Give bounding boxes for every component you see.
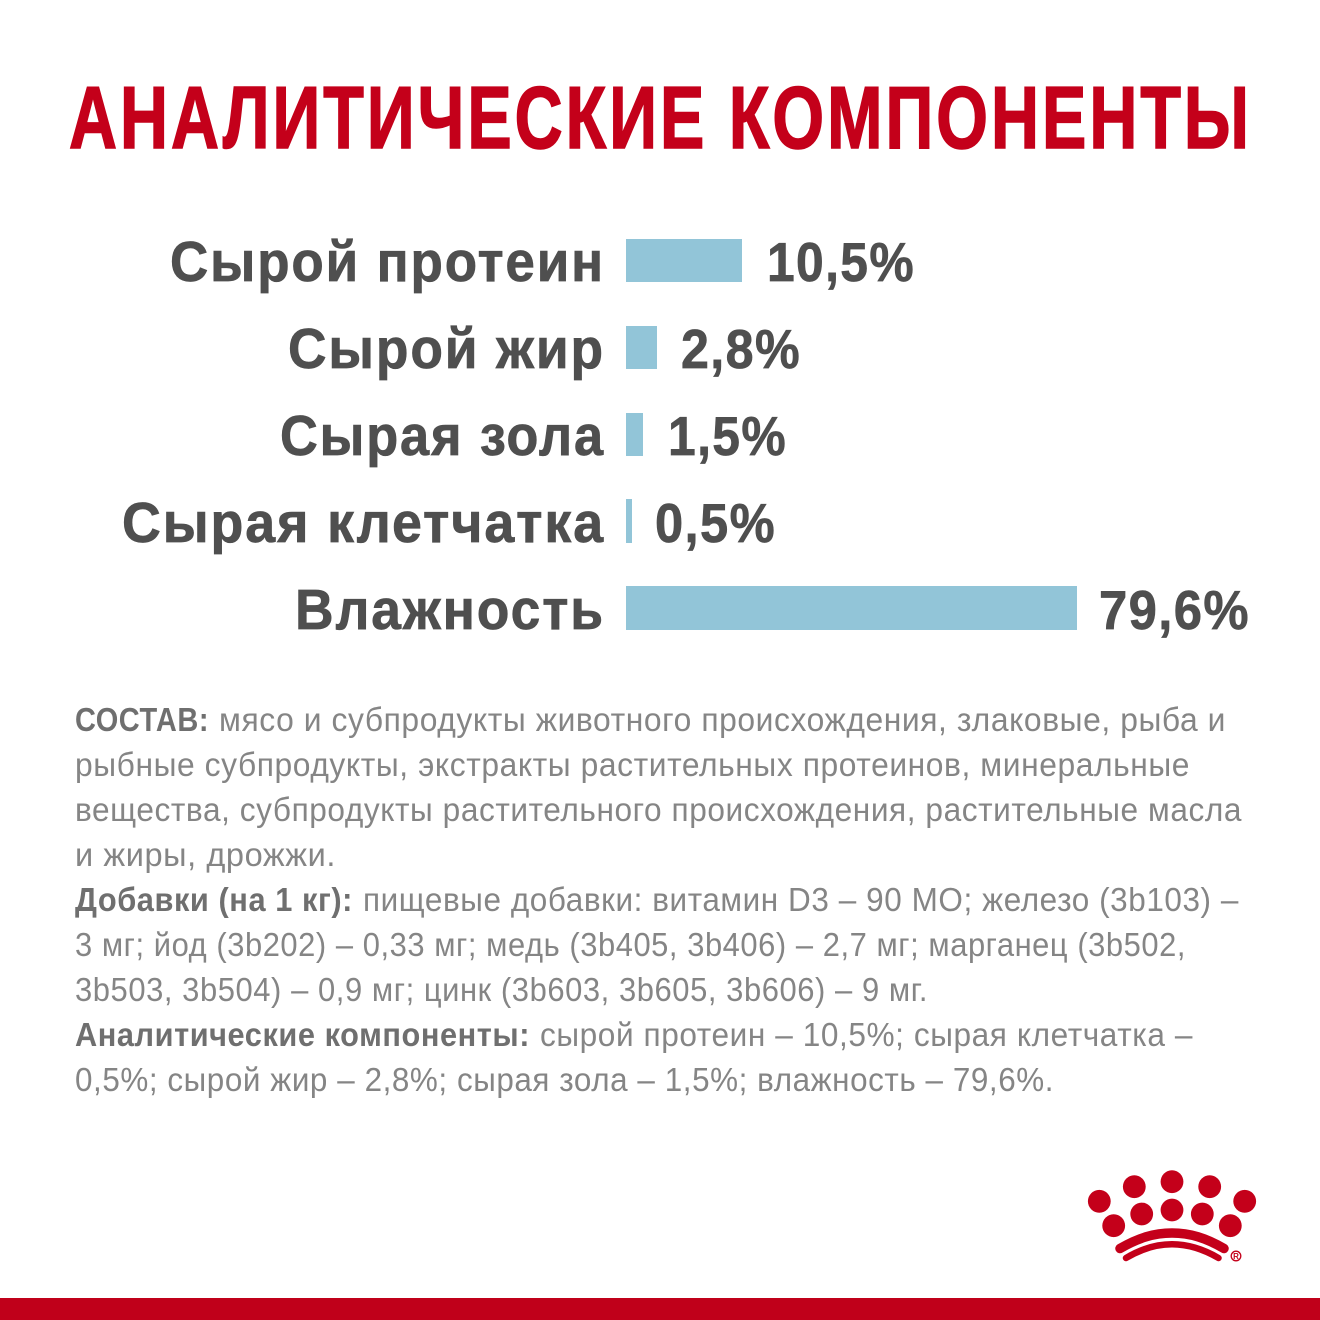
footer red band bbox=[0, 1298, 1320, 1320]
icon: royal crown logo: R bbox=[1233, 1252, 1239, 1261]
composition text block: и жиры, дрожжи. bbox=[75, 836, 336, 873]
icon: royal crown logo bbox=[1088, 1170, 1256, 1261]
composition text block: Аналитические компоненты: bbox=[75, 1016, 530, 1053]
row: crude fat: 2,8% bbox=[681, 318, 801, 380]
row: moisture: Влажность bbox=[295, 578, 605, 642]
bar chart: analytical components bbox=[122, 230, 1250, 642]
composition text block: пищевые добавки: витамин D3 – 90 МО; железо (3b103) – bbox=[363, 881, 1239, 918]
row: crude protein: 10,5% bbox=[767, 231, 915, 293]
composition text block bbox=[75, 701, 1242, 1098]
composition text block: вещества, субпродукты растительного происхождения, растительные масла bbox=[75, 791, 1242, 828]
row: moisture: 79,6% bbox=[1099, 579, 1250, 641]
composition text block: СОСТАВ: bbox=[75, 701, 209, 738]
row: crude fat: Сырой жир bbox=[288, 317, 605, 381]
composition text block: рыбные субпродукты, экстракты растительных протеинов, минеральные bbox=[75, 746, 1190, 783]
composition text block: 3 мг; йод (3b202) – 0,33 мг; медь (3b405, 3b406) – 2,7 мг; марганец (3b502, bbox=[75, 926, 1186, 963]
row: crude fat bbox=[288, 317, 801, 381]
composition text block: 0,5%; сырой жир – 2,8%; сырая зола – 1,5%; влажность – 79,6%. bbox=[75, 1061, 1054, 1098]
composition text block: Добавки (на 1 кг): bbox=[75, 881, 353, 918]
row: crude ash: 1,5% bbox=[668, 405, 787, 467]
row: crude fibre: 0,5% bbox=[655, 492, 776, 554]
row: crude fibre: Сырая клетчатка bbox=[122, 491, 605, 555]
composition text block: мясо и субпродукты животного происхождения, злаковые, рыба и bbox=[219, 701, 1226, 738]
row: crude protein bbox=[170, 230, 915, 294]
row: moisture bbox=[295, 578, 1250, 642]
row: crude ash: Сырая зола bbox=[280, 404, 605, 468]
composition text block: 3b503, 3b504) – 0,9 мг; цинк (3b603, 3b605, 3b606) – 9 мг. bbox=[75, 971, 928, 1008]
row: crude ash bbox=[280, 404, 787, 468]
composition text block: сырой протеин – 10,5%; сырая клетчатка – bbox=[540, 1016, 1193, 1053]
row: crude protein: Сырой протеин bbox=[170, 230, 605, 294]
